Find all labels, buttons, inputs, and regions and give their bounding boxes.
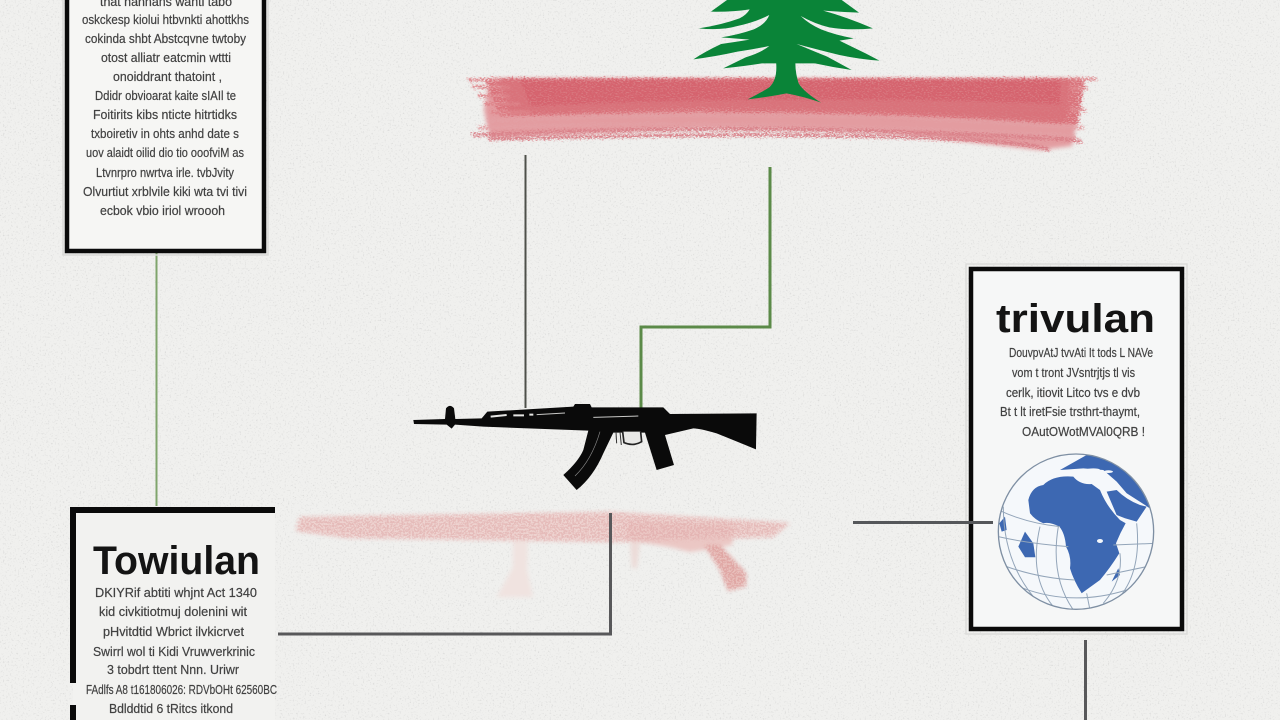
text block: bottom-left body copy: Bdlddtid 6 tRitcs itkond	[109, 702, 233, 716]
text block: top-left body copy	[82, 0, 249, 218]
text block: bottom-left body copy: kid civkitiotmuj dolenini wit	[99, 605, 248, 619]
text block: top-left body copy: otost alliatr eatcmin wttti	[101, 51, 231, 65]
faint pink smear	[296, 512, 790, 597]
connector: dark line to globe panel	[853, 521, 993, 524]
text block: top-left body copy: txboiretiv in ohts anhd date s	[91, 127, 239, 141]
text block: top-left body copy: Ddidr obvioarat kaite sIAIl te	[95, 89, 236, 103]
text block: top-left body copy: Foitirits kibs nticte hitrtidks	[93, 108, 237, 122]
text block: top-left body copy: onoiddrant thatoint ,	[113, 70, 222, 84]
text block: right body copy	[1000, 346, 1153, 439]
text block: bottom-left body copy	[86, 586, 277, 716]
icon: globe showing Africa	[998, 453, 1158, 610]
panel: bottom-left text box	[73, 510, 277, 720]
text block: top-left body copy: Olvurtiut xrblvile kiki wta tvi tivi	[83, 185, 247, 199]
text block: right body copy: Bt t lt iretFsie trsthrt-thaymt,	[1000, 405, 1140, 419]
heading: trivulan: trivulan	[996, 297, 1155, 341]
icon: rifle silhouette	[413, 404, 757, 490]
cedar tree	[693, 0, 879, 103]
text block: right body copy: OAutOWotMVAl0QRB !	[1022, 425, 1145, 439]
text block: top-left body copy: cokinda shbt Abstcqvne twtoby	[85, 32, 247, 46]
text block: bottom-left body copy: FAdlfs A8 t161806026: RDVbOHt 62560BC	[86, 683, 277, 697]
text block: top-left body copy: uov alaidt oilid dio tio ooofviM as	[86, 146, 244, 160]
text block: top-left body copy: ecbok vbio iriol wroooh	[100, 204, 225, 218]
panel: top-left text box	[63, 0, 268, 255]
text block: bottom-left body copy: pHvitdtid Wbrict ilvkicrvet	[103, 625, 245, 639]
connector: green elbow from brush to rifle	[641, 167, 770, 408]
red brush stroke	[468, 78, 1097, 150]
text block: right body copy: cerlk, itiovit Litco tvs e dvb	[1006, 386, 1140, 400]
text block: top-left body copy: Ltvnrpro nwrtva irle. tvbJvity	[96, 166, 235, 180]
text block: right body copy: DouvpvAtJ tvvAti It tods L NAVe	[1009, 346, 1153, 360]
connector: green from top panel to bottom panel	[156, 253, 158, 506]
heading: Towiulan: Towiulan	[93, 539, 260, 583]
connector: dark elbow from bottom panel to smear	[278, 513, 610, 634]
connector: dark vertical from brush to rifle	[524, 155, 526, 408]
text block: bottom-left body copy: Swirrl wol ti Kidi Vruwverkrinic	[93, 645, 255, 659]
text block: bottom-left body copy: 3 tobdrt ttent Nnn. Uriwr	[107, 663, 239, 677]
text block: bottom-left body copy: DKIYRif abtiti whjnt Act 1340	[95, 586, 257, 600]
connector: dark line below globe panel	[1084, 640, 1087, 720]
panel: right globe box	[966, 264, 1187, 634]
text block: right body copy: vom t tront JVsntrjtjs tl vis	[1012, 366, 1135, 380]
text block: top-left body copy: oskckesp kiolui htbvnkti ahottkhs	[82, 13, 249, 27]
